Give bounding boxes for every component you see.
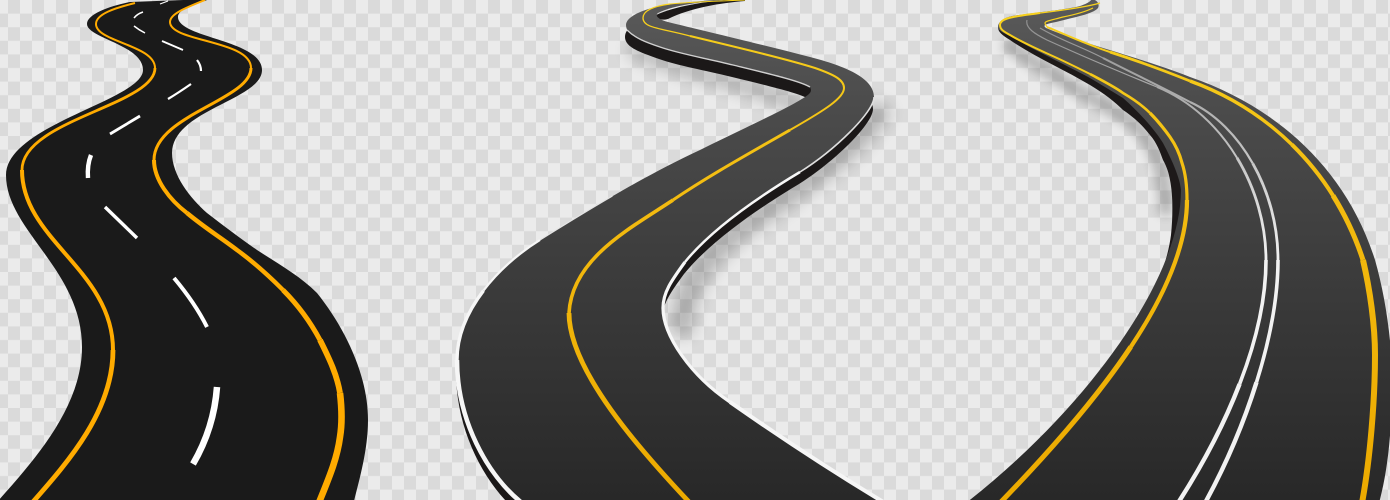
- road 2 dark sliver under far bend: [656, 0, 745, 20]
- road 2 asphalt surface: [457, 0, 885, 500]
- road 1 surface: [0, 0, 368, 500]
- road 2: 3D road with white edges and central yellow line: [456, 0, 885, 500]
- road 1: flat black winding road: [0, 0, 368, 500]
- road 3 drop shadow: [1005, 42, 1166, 215]
- road 3 right yellow line: [1045, 8, 1375, 500]
- road 3 left yellow line: [998, 3, 1187, 500]
- road 1 white centre dashes: [88, 1, 217, 464]
- road 3 double white centre line: [1027, 20, 1278, 500]
- road 2 yellow centre line: [569, 0, 844, 500]
- road 1 right yellow line: [154, 0, 342, 500]
- road 3: 3D road with yellow edges and double white centre line: [966, 0, 1390, 500]
- road 2 drop shadows: [630, 48, 882, 335]
- road 2 white edge lines: [457, 30, 885, 500]
- road 3 asphalt surface: [966, 0, 1390, 500]
- road 3 dark side wall: [998, 27, 1190, 280]
- road 1 left yellow line: [22, 3, 155, 500]
- road 2 dark side wall: [456, 21, 884, 500]
